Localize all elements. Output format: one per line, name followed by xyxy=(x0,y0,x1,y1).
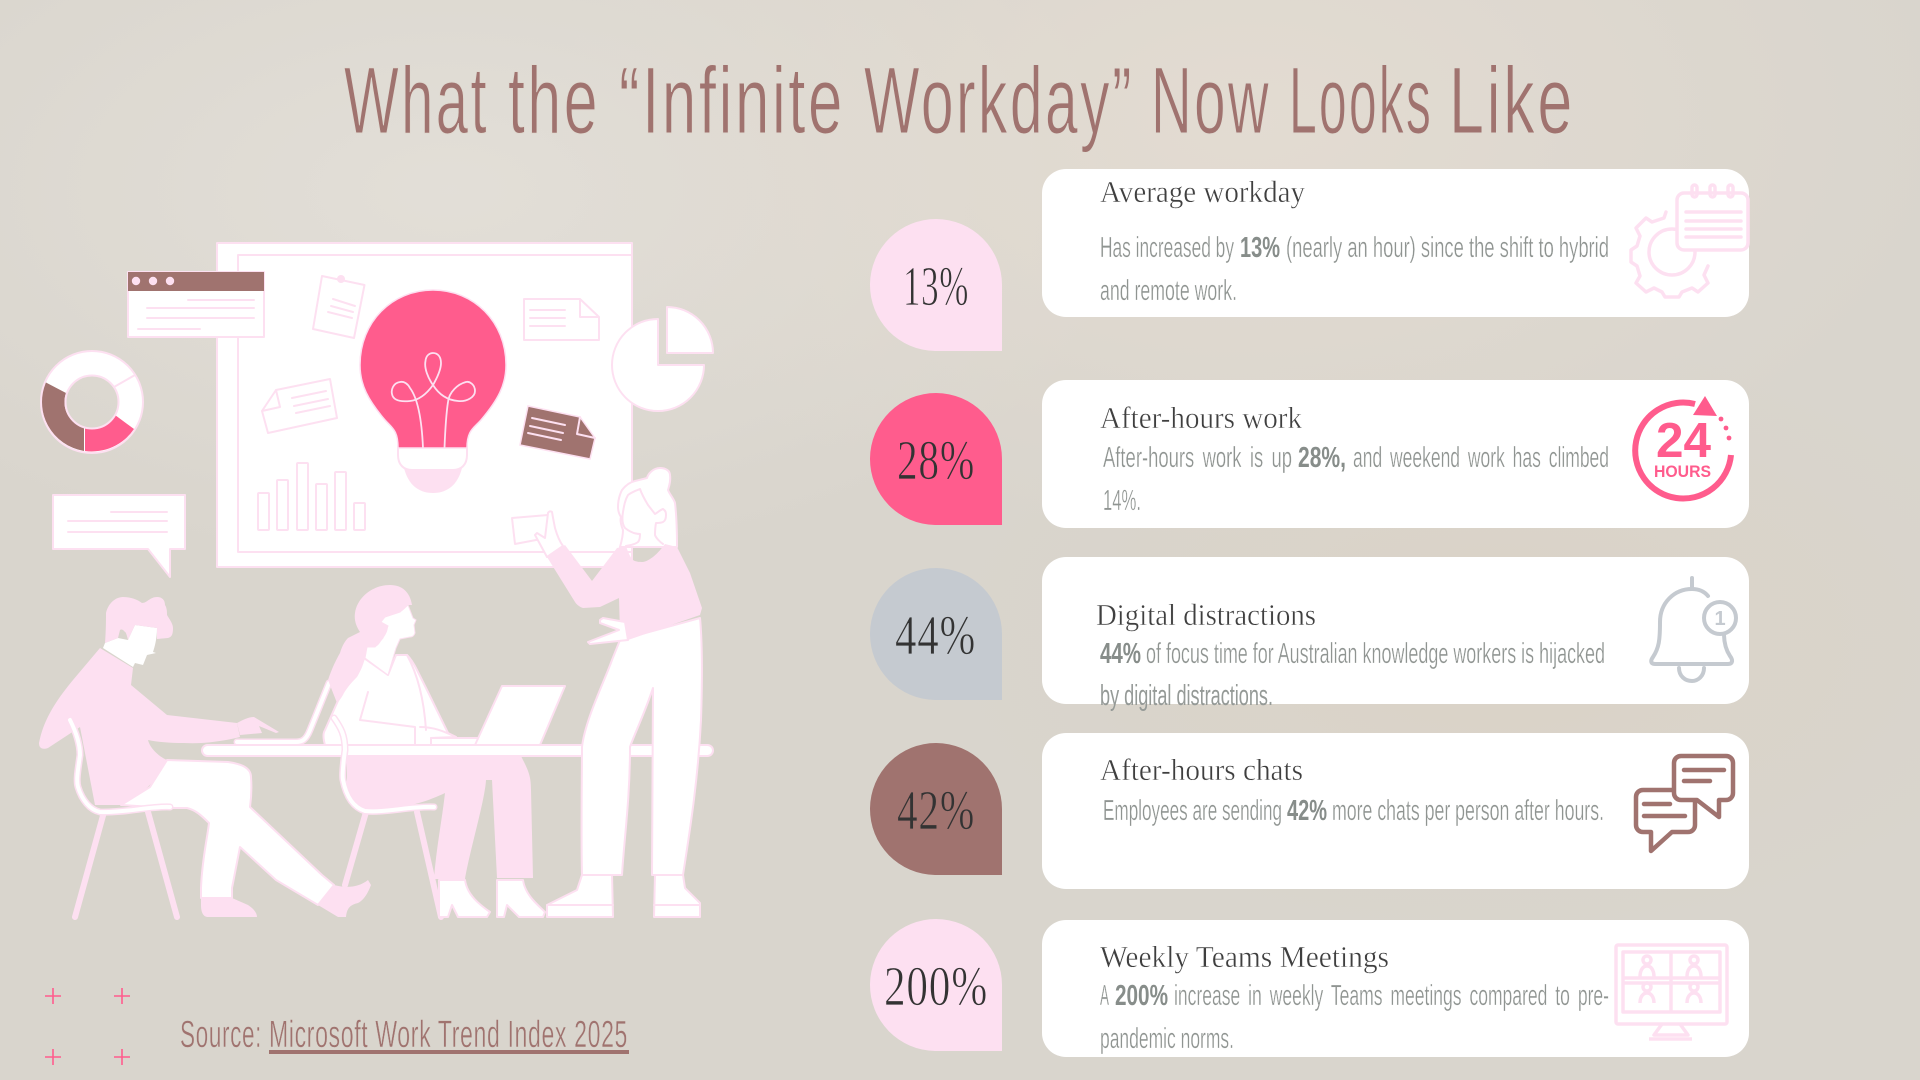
body text: by digital distractions. xyxy=(1100,680,1273,712)
icon: browser window xyxy=(128,272,264,337)
heading: After-hours chats xyxy=(1100,752,1303,787)
title: Like xyxy=(1449,48,1575,154)
standing woman's shirt xyxy=(547,544,702,640)
body text: and remote work. xyxy=(1100,275,1237,307)
icon: 24 hours: HOURS xyxy=(1654,462,1711,481)
icon: notification bell xyxy=(1651,578,1736,681)
icon: light bulb xyxy=(360,290,506,493)
body text xyxy=(1100,980,1609,1055)
body text: 14%. xyxy=(1103,485,1141,517)
icon: donut chart xyxy=(41,351,143,453)
body text: of focus time for Australian knowledge workers is hijacked xyxy=(1146,638,1605,670)
teardrop: 13% xyxy=(870,219,1002,351)
icon: document left xyxy=(262,379,337,433)
heading: Digital distractions xyxy=(1096,597,1316,632)
source text xyxy=(180,1014,629,1056)
illustration: team meeting around a whiteboard xyxy=(39,243,713,917)
standing woman's face xyxy=(622,489,666,546)
body text: more chats per person after hours. xyxy=(1332,795,1604,827)
icon: chat bubbles xyxy=(1636,756,1733,851)
icon: brown document xyxy=(520,406,595,459)
title: Workday” xyxy=(864,48,1134,154)
heading: After-hours work xyxy=(1100,400,1302,435)
icon: video call monitor xyxy=(1616,945,1727,1039)
icon: bar chart xyxy=(258,463,365,530)
body text: and weekend work has climbed xyxy=(1353,442,1609,474)
body text xyxy=(1100,232,1609,307)
source text: Microsoft Work Trend Index 2025 xyxy=(269,1014,628,1056)
figure: seated woman xyxy=(324,585,545,917)
raised hand holding card xyxy=(512,515,548,544)
card: average workday xyxy=(1042,169,1749,317)
heading: Weekly Teams Meetings xyxy=(1100,939,1389,974)
card: after-hours work xyxy=(1042,380,1749,528)
teardrop: 42%: 42% xyxy=(897,780,975,842)
title: the xyxy=(508,48,600,154)
icon: pinned note xyxy=(313,275,364,338)
stat row: digital distractions xyxy=(870,557,1749,712)
source text: Source: xyxy=(180,1014,262,1056)
title xyxy=(344,48,1575,154)
icon: document right xyxy=(524,299,599,340)
body text: 13% xyxy=(1240,232,1280,264)
icon: notification bell: 1 xyxy=(1714,608,1726,630)
icon: pie chart xyxy=(612,307,713,411)
teardrop: 44%: 44% xyxy=(895,605,976,667)
teardrop: 13%: 13% xyxy=(903,256,969,318)
teardrop: 28% xyxy=(870,393,1002,525)
icon: gear and calendar xyxy=(1631,185,1748,297)
card: weekly teams meetings xyxy=(1042,920,1749,1057)
card: after-hours chats xyxy=(1042,733,1749,889)
teardrop: 200%: 200% xyxy=(884,956,988,1018)
body text: 42% xyxy=(1287,795,1327,827)
icon: 24 hours xyxy=(1635,396,1731,499)
stat row: weekly teams meetings xyxy=(870,919,1749,1057)
seated woman's face xyxy=(365,605,416,675)
body text: A xyxy=(1100,980,1109,1012)
body text: 44% xyxy=(1100,638,1141,670)
stat row: after-hours chats xyxy=(870,733,1749,889)
table xyxy=(202,745,713,756)
body text: 28%, xyxy=(1298,442,1346,474)
teardrop: 42% xyxy=(870,743,1002,875)
body text: Has increased by xyxy=(1100,232,1234,264)
stat row: after-hours work xyxy=(870,380,1749,528)
laptop right xyxy=(431,686,565,745)
body text xyxy=(1100,638,1605,712)
stat row: average workday xyxy=(870,169,1749,351)
heading: Average workday xyxy=(1100,174,1305,209)
decorative plus marks xyxy=(45,988,130,1065)
teardrop: 200% xyxy=(870,919,1002,1051)
whiteboard xyxy=(217,243,632,567)
card: digital distractions xyxy=(1042,557,1749,704)
body text xyxy=(1103,442,1609,517)
man's hair xyxy=(105,597,173,643)
body text: increase in weekly Teams meetings compared to pre- xyxy=(1174,980,1609,1012)
title: What xyxy=(344,48,489,154)
figure: standing woman xyxy=(512,468,702,917)
body text: 200% xyxy=(1115,980,1168,1012)
teardrop: 44% xyxy=(870,568,1002,700)
seated woman's hair xyxy=(328,585,412,703)
body text: (nearly an hour) since the shift to hybrid xyxy=(1286,232,1609,264)
title: Looks xyxy=(1289,48,1433,154)
title: Now xyxy=(1151,48,1271,154)
body text xyxy=(1103,795,1604,827)
body text: pandemic norms. xyxy=(1100,1023,1234,1055)
title: “Infinite xyxy=(619,48,845,154)
teardrop: 28%: 28% xyxy=(897,430,975,492)
speech bubble xyxy=(53,495,185,577)
standing woman's hair outline xyxy=(618,468,677,547)
body text: After-hours work is up xyxy=(1103,442,1292,474)
body text: Employees are sending xyxy=(1103,795,1282,827)
icon: 24 hours: 24 xyxy=(1656,414,1711,468)
figure: seated man xyxy=(39,597,371,917)
laptop left xyxy=(237,683,329,742)
man's face xyxy=(103,625,157,667)
